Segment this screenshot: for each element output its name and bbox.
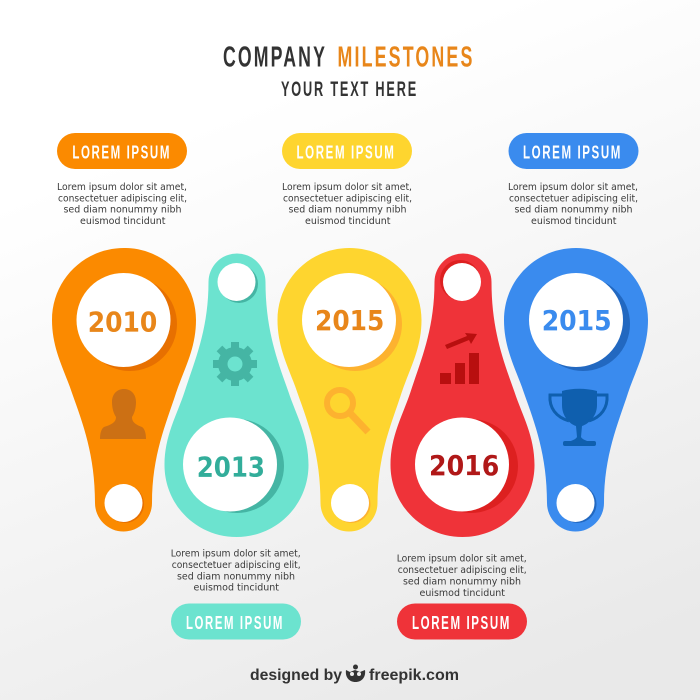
label: orange pill — [57, 133, 187, 169]
text block: orange — [57, 182, 187, 227]
icon: growth chart — [440, 333, 479, 384]
year disc 2015: 2015 — [542, 305, 612, 337]
year disc 2015: 2015 — [315, 305, 384, 337]
title — [223, 42, 474, 74]
year disc 2015 — [302, 273, 402, 371]
year disc 2010 — [76, 273, 177, 371]
icon: trophy — [550, 389, 607, 446]
footer credit: freepik.com — [369, 667, 459, 684]
text block: teal — [171, 549, 301, 594]
panel: 2016 red drop — [390, 254, 534, 537]
panel: 2013 teal drop — [164, 254, 308, 537]
text block: yellow: sed diam nonummy nibh — [288, 205, 407, 216]
text block: blue: Lorem ipsum dolor sit amet, — [508, 182, 638, 193]
text block: teal: Lorem ipsum dolor sit amet, — [171, 549, 301, 560]
label: red pill — [397, 604, 527, 640]
node: bottom hole — [556, 484, 596, 523]
text block: teal: euismod tincidunt — [194, 583, 279, 594]
text block: teal: sed diam nonummy nibh — [177, 571, 295, 582]
text block: yellow — [282, 182, 412, 227]
text block: yellow: Lorem ipsum dolor sit amet, — [282, 182, 412, 193]
text block: red — [397, 554, 527, 599]
node: top hole — [440, 260, 481, 301]
panel: 2015 blue drop — [504, 248, 648, 532]
text block: orange: euismod tincidunt — [80, 216, 166, 227]
text block: yellow: euismod tincidunt — [305, 216, 391, 227]
panel: 2015 yellow drop — [278, 248, 422, 532]
node: bottom hole — [104, 484, 144, 523]
footer credit: designed by — [250, 667, 342, 684]
icon: gear — [213, 342, 257, 386]
text block: orange: Lorem ipsum dolor sit amet, — [57, 182, 187, 193]
year disc 2016: 2016 — [429, 450, 499, 482]
text block: blue: consectetuer adipiscing elit, — [509, 193, 638, 204]
title: COMPANY — [223, 42, 327, 74]
text block: teal: consectetuer adipiscing elit, — [172, 560, 301, 571]
text block: blue: euismod tincidunt — [531, 216, 617, 227]
year disc 2016 — [415, 418, 518, 513]
year disc 2010: 2010 — [88, 307, 157, 339]
label: yellow pill: LOREM IPSUM — [296, 142, 396, 162]
text block: yellow: consectetuer adipiscing elit, — [283, 193, 412, 204]
subtitle: YOUR TEXT HERE — [281, 78, 418, 101]
year disc 2015 — [529, 273, 630, 371]
text block: orange: sed diam nonummy nibh — [64, 205, 182, 216]
icon: person — [100, 389, 146, 439]
text block: red: euismod tincidunt — [420, 588, 505, 599]
label: yellow pill — [282, 133, 412, 169]
text block: red: Lorem ipsum dolor sit amet, — [397, 554, 527, 565]
label: orange pill: LOREM IPSUM — [72, 142, 171, 162]
label: red pill: LOREM IPSUM — [412, 613, 511, 633]
year disc 2013 — [183, 418, 284, 513]
title: MILESTONES — [338, 42, 474, 74]
label: blue pill: LOREM IPSUM — [523, 142, 622, 162]
text block: blue: sed diam nonummy nibh — [514, 205, 633, 216]
icon: magnifier — [327, 390, 368, 432]
text block: red: sed diam nonummy nibh — [403, 576, 521, 588]
icon: freepik logo — [346, 664, 365, 682]
label: blue pill — [508, 133, 638, 169]
panel: 2010 orange drop — [52, 248, 196, 532]
year disc 2013: 2013 — [197, 452, 265, 484]
text block: blue — [508, 182, 638, 227]
label: teal pill: LOREM IPSUM — [186, 613, 284, 633]
node: top hole — [218, 263, 258, 303]
label: teal pill — [171, 604, 301, 640]
node: bottom hole — [331, 484, 370, 523]
text block: orange: consectetuer adipiscing elit, — [58, 193, 187, 204]
text block: red: consectetuer adipiscing elit, — [398, 565, 527, 576]
footer credit — [250, 664, 459, 684]
